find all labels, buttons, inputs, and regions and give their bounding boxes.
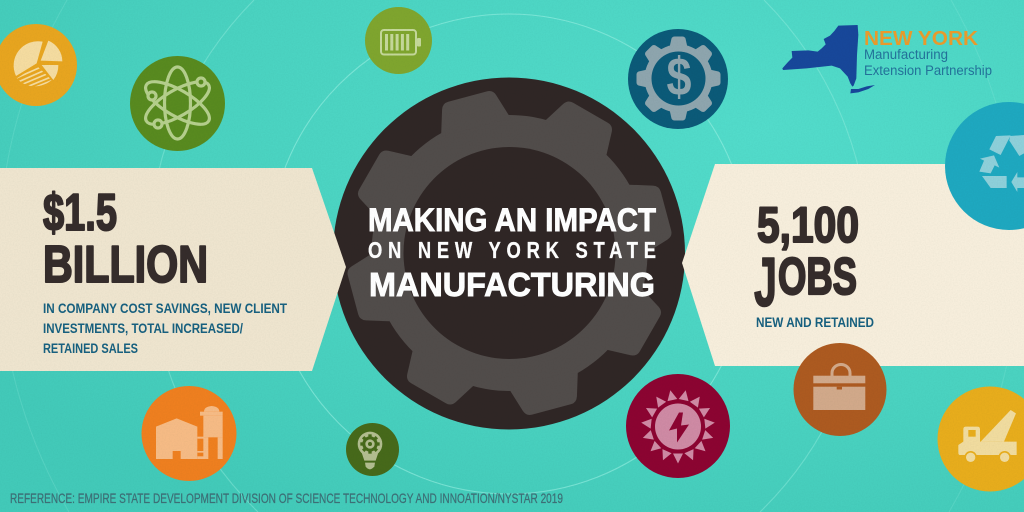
savings description	[43, 301, 288, 356]
icon: recycle	[945, 102, 1024, 230]
icon: toolbox	[794, 343, 886, 436]
icon: dollar gear: $	[666, 47, 692, 107]
logo wordmark: NEW YORK	[864, 28, 979, 50]
text block: savings statistic	[43, 184, 288, 356]
title	[368, 202, 656, 304]
logo wordmark: Extension Partnership	[864, 63, 992, 78]
big number: 5,100 jobs: J	[754, 243, 777, 321]
central dark circle with gear	[311, 55, 708, 451]
panel: left banner	[0, 168, 346, 371]
logo wordmark: Manufacturing	[864, 47, 948, 62]
icon: tow truck	[938, 386, 1024, 492]
big number: $1.5 billion: BILLION	[43, 236, 208, 294]
savings description: RETAINED SALES	[43, 341, 138, 356]
title: MANUFACTURING	[369, 267, 655, 304]
big number: 5,100 jobs: OBS	[778, 248, 857, 306]
icon: atom	[130, 56, 225, 151]
icon: sun with lightning bolt	[626, 374, 730, 478]
title: ON NEW YORK STATE	[368, 238, 656, 264]
big number: 5,100 jobs	[754, 197, 859, 321]
jobs description: NEW AND RETAINED	[756, 314, 874, 330]
logo: New York MEP	[782, 25, 992, 93]
icon: New York state map	[782, 25, 875, 93]
savings description: INVESTMENTS, TOTAL INCREASED/	[43, 321, 243, 336]
icon: pie chart	[0, 24, 77, 106]
savings description: IN COMPANY COST SAVINGS, NEW CLIENT	[43, 301, 288, 316]
panel: right banner	[682, 164, 1024, 366]
icon: lightbulb with gear	[346, 423, 399, 476]
icon: battery	[365, 7, 432, 74]
source reference: REFERENCE: EMPIRE STATE DEVELOPMENT DIVISION OF SCIENCE TECHNOLOGY AND INNOATION/NYSTAR 2019	[10, 490, 563, 506]
gear graphic	[311, 55, 708, 451]
icon: factory	[142, 386, 236, 481]
big number: $1.5 billion	[43, 184, 208, 294]
big number: $1.5 billion: $1.5	[43, 184, 117, 242]
logo wordmark	[864, 28, 992, 78]
text block: jobs statistic	[754, 197, 874, 330]
big number: 5,100 jobs: 5,100	[757, 197, 859, 253]
title: MAKING AN IMPACT	[368, 202, 656, 238]
icon: dollar gear	[628, 29, 728, 129]
